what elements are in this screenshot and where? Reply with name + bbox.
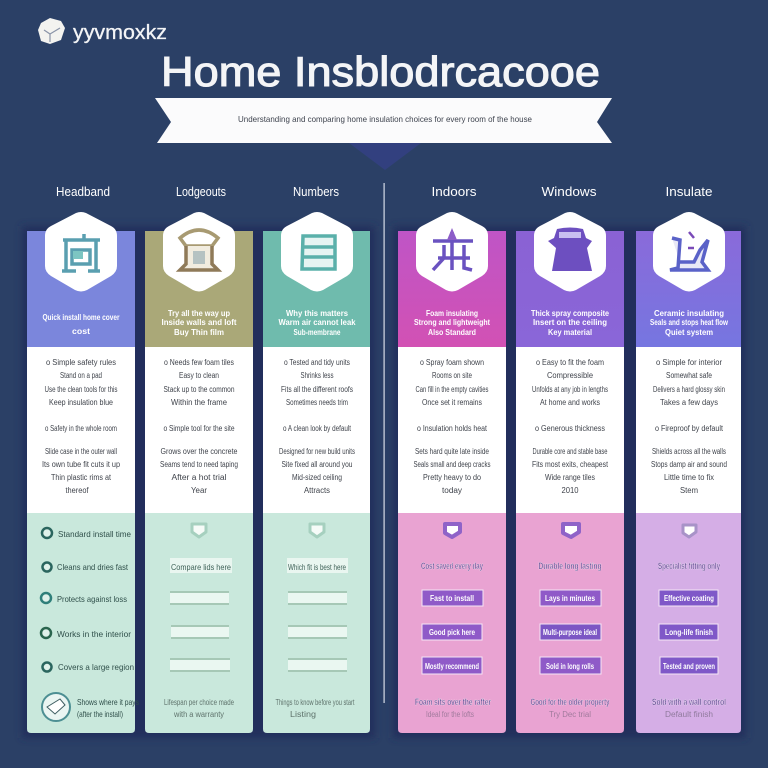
body text: Shields across all the walls <box>652 447 726 456</box>
body text: Seals small and deep cracks <box>414 460 490 469</box>
body text: Easy to clean <box>179 371 219 380</box>
body text: Once set it remains <box>422 398 482 407</box>
footer text: Foam sits over the rafter <box>415 697 491 707</box>
footer text <box>77 697 139 719</box>
body text: o Generous thickness <box>535 424 605 433</box>
footer text: Try Dec trial <box>549 710 591 719</box>
column headings: Headband <box>56 185 110 199</box>
checklist: Works in the interior <box>57 629 131 639</box>
body text: Use the clean tools for this <box>44 385 118 394</box>
body text: Designed for new build units <box>279 447 355 456</box>
body text: Stem <box>680 486 698 495</box>
body text: Mid-sized ceiling <box>292 473 342 482</box>
body text: o A clean look by default <box>283 424 352 433</box>
body text: Little time to fix <box>664 473 714 482</box>
checklist <box>41 528 134 672</box>
logo wordmark: yyvmoxkz <box>73 22 167 44</box>
icon: hexagon with panel <box>281 212 353 292</box>
body text: After a hot trial <box>172 473 227 482</box>
body text: Site fixed all around you <box>282 460 352 469</box>
header text: Insert on the ceiling <box>533 317 607 327</box>
icon: hexagon with boiler <box>416 212 488 292</box>
icon: shield <box>310 524 324 537</box>
body text: Within the frame <box>171 398 228 407</box>
centre divider line <box>384 183 385 703</box>
icon: shield <box>445 524 460 537</box>
checklist: Covers a large region <box>58 662 134 672</box>
icon: logo cube <box>38 18 65 44</box>
footer text: Default finish <box>665 710 713 719</box>
body text: o Simple safety rules <box>46 358 116 367</box>
ribbon banner <box>155 98 612 143</box>
body text: Stand on a pad <box>60 371 102 380</box>
spec labels <box>421 561 483 674</box>
header text: Key material <box>548 327 592 337</box>
header text: Foam insulating <box>426 308 478 318</box>
icon: hexagon with furnace <box>534 212 606 292</box>
body text: o Needs few foam tiles <box>164 358 234 367</box>
column headings <box>56 185 713 199</box>
header text <box>162 308 237 337</box>
body text: o Simple for interior <box>656 358 722 367</box>
header text: Warm air cannot leak <box>278 317 356 327</box>
body text: Unfolds at any job in lengths <box>532 385 608 394</box>
body text <box>414 358 490 495</box>
logo <box>38 18 167 44</box>
spec labels: Effective coating <box>664 594 714 603</box>
panel: column 5 <box>516 212 624 733</box>
body text: Stops damp air and sound <box>651 460 727 469</box>
body text <box>42 358 120 495</box>
body text: o Fireproof by default <box>655 424 724 433</box>
banner text: Understanding and comparing home insulation choices for every room of the house <box>238 114 532 124</box>
panel: column 3 <box>263 212 370 733</box>
body text: Stack up to the common <box>164 385 234 394</box>
spec labels: Durable long lasting <box>538 561 602 571</box>
body text: o Easy to fit the foam <box>536 358 604 367</box>
header text <box>42 312 120 336</box>
icon: round badge <box>42 693 70 721</box>
spec labels <box>538 561 602 674</box>
panel: column 4 <box>398 212 506 733</box>
body text: Year <box>191 486 207 495</box>
spec labels: Good pick here <box>429 628 475 637</box>
checklist: Standard install time <box>58 529 131 539</box>
header text <box>278 308 356 337</box>
body text: Shrinks less <box>300 371 334 380</box>
spec labels <box>287 558 348 672</box>
column headings: Windows <box>542 185 596 199</box>
body text: Compressible <box>547 371 594 380</box>
body text: Seams tend to need taping <box>160 460 238 469</box>
footer text <box>652 697 726 719</box>
header text: Quiet system <box>665 327 713 337</box>
footer text <box>276 698 355 719</box>
spec labels: Cost saved every day <box>421 561 483 571</box>
body text: o Tested and tidy units <box>284 358 350 367</box>
spec labels: Long-life finish <box>665 628 713 637</box>
header text: Ceramic insulating <box>654 308 724 318</box>
icon: shield <box>563 524 579 537</box>
body text: Sometimes needs trim <box>286 398 348 407</box>
checklist: Cleans and dries fast <box>57 562 129 572</box>
body text: Attracts <box>304 486 330 495</box>
header text: Try all the way up <box>168 308 230 318</box>
title: Home Insblodrcacooe <box>161 48 600 95</box>
panel: column 1 <box>27 212 139 733</box>
body text <box>279 358 355 495</box>
body text: thereof <box>66 486 89 495</box>
spec labels: Mostly recommend <box>425 662 479 671</box>
body text: Fits all the different roofs <box>281 385 353 394</box>
footer text: Good for the older property <box>530 697 610 707</box>
header text <box>531 308 609 337</box>
footer text <box>530 697 610 719</box>
body text: o Simple tool for the site <box>164 424 235 433</box>
footer text: Listing <box>290 710 316 719</box>
body text <box>651 358 727 495</box>
body text: Keep insulation blue <box>49 398 113 407</box>
body text: o Safety in the whole room <box>45 424 117 433</box>
header text <box>414 308 490 337</box>
body text: o Spray foam shown <box>420 358 484 367</box>
body text: Takes a few days <box>660 398 718 407</box>
footer text: with a warranty <box>173 710 224 719</box>
body text <box>532 358 609 495</box>
checklist: Protects against loss <box>57 594 127 604</box>
body text: Sets hard quite late inside <box>415 447 489 456</box>
body text: o Insulation holds heat <box>417 424 488 433</box>
header text <box>650 308 728 337</box>
header text: Thick spray composite <box>531 308 609 318</box>
spec labels: Compare lids here <box>171 562 231 572</box>
body text: Rooms on site <box>432 371 472 380</box>
body text: Fits most exits, cheapest <box>532 460 609 469</box>
body text: today <box>442 486 462 495</box>
footer text: Things to know before you start <box>276 698 355 707</box>
column headings: Indoors <box>432 185 476 199</box>
header text: Strong and lightweight <box>414 317 490 327</box>
body text: Slide case in the outer wall <box>45 447 117 456</box>
body text <box>160 358 238 495</box>
icon: hexagon with stove <box>163 212 235 292</box>
footer text <box>164 698 234 719</box>
spec labels: Specialist fitting only <box>658 561 720 571</box>
header text: Buy Thin film <box>174 327 224 337</box>
footer text: Lifespan per choice made <box>164 698 234 707</box>
footer text: Sold with a wall control <box>652 697 726 707</box>
body text: 2010 <box>562 486 579 495</box>
body text: Durable core and stable base <box>532 447 608 456</box>
column headings: Lodgeouts <box>176 185 226 199</box>
body text: Wide range tiles <box>545 473 595 482</box>
footer text: (after the install) <box>77 709 123 719</box>
icon: shield <box>683 525 696 537</box>
body text: At home and works <box>540 398 600 407</box>
body text: Somewhat safe <box>666 371 712 380</box>
icon: hexagon with tank <box>653 212 725 292</box>
spec labels: Multi-purpose ideal <box>543 628 597 637</box>
icon: hexagon with building <box>45 212 117 292</box>
header text: Why this matters <box>286 308 348 318</box>
header text: cost <box>72 326 90 336</box>
spec labels: Sold in long rolls <box>546 662 594 671</box>
body text: Its own tube fit cuts it up <box>42 460 120 469</box>
body text: Pretty heavy to do <box>423 473 481 482</box>
body text: Grows over the concrete <box>160 447 238 456</box>
spec labels <box>170 558 232 672</box>
spec labels: Lays in minutes <box>545 594 595 603</box>
footer text <box>415 697 491 719</box>
spec labels: Fast to install <box>430 594 474 603</box>
header text: Sub-membrane <box>294 327 341 337</box>
column headings: Insulate <box>666 185 713 199</box>
column headings: Numbers <box>293 185 339 199</box>
body text: Can fill in the empty cavities <box>416 385 488 394</box>
panel: column 6 <box>636 212 741 733</box>
spec labels <box>658 561 720 674</box>
header text: Quick install home cover <box>42 312 120 322</box>
header text: Also Standard <box>428 327 476 337</box>
banner pointer triangle <box>349 143 421 170</box>
footer text: Shows where it pays <box>77 697 139 707</box>
icon: shield <box>192 524 206 537</box>
spec labels: Tested and proven <box>663 662 715 671</box>
header text: Seals and stops heat flow <box>650 317 728 327</box>
header text: Inside walls and loft <box>162 317 237 327</box>
footer text: Ideal for the lofts <box>426 710 474 719</box>
panel: column 2 <box>145 212 253 733</box>
body text: Delivers a hard glossy skin <box>653 385 725 394</box>
body text: Thin plastic rims at <box>51 473 112 482</box>
spec labels: Which fit is best here <box>288 562 346 572</box>
